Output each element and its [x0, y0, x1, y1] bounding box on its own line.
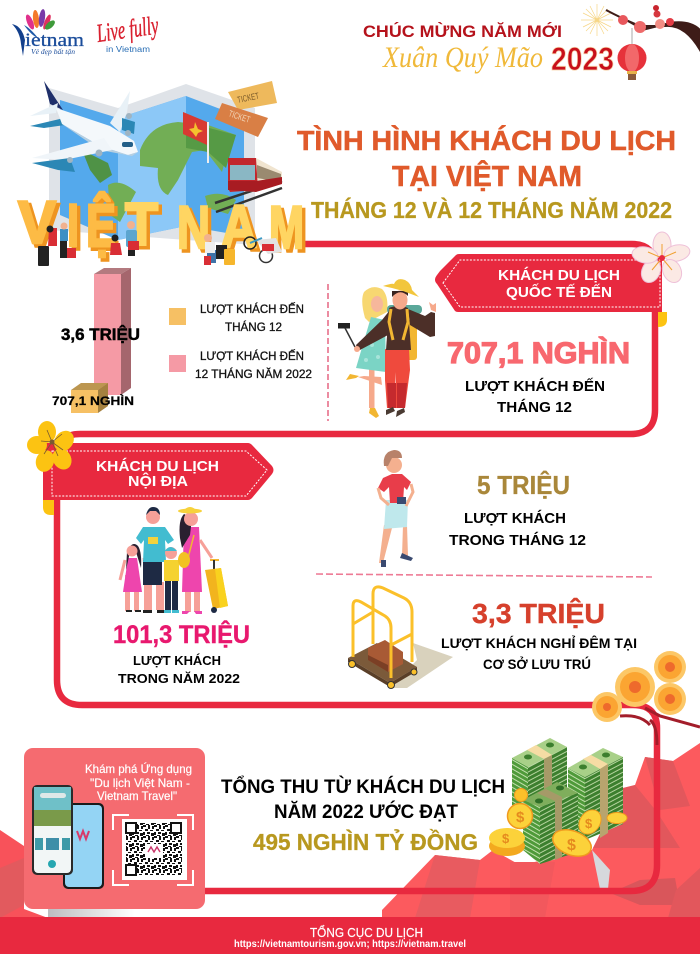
girl: [120, 544, 146, 612]
illustration: money stacks and coins: [489, 738, 627, 864]
total revenue text: NĂM 2022 ƯỚC ĐẠT: [274, 801, 458, 823]
3D letters VIET NAM: Ệ: [86, 192, 116, 259]
banner: domestic visitors: NỘI ĐỊA: [128, 472, 188, 490]
panel: app promotion: [24, 748, 205, 909]
stat: 101.3 million: LƯỢT KHÁCH: [133, 653, 221, 668]
3D letters VIET NAM: I: [67, 192, 79, 259]
stat: 3.3 million: [441, 598, 637, 672]
icon: yellow flower: [27, 421, 78, 474]
boy: [164, 547, 179, 613]
3D letters VIET NAM: I: [70, 195, 82, 262]
3D letters VIET NAM: M: [272, 197, 307, 264]
illustration: tourist boy: [378, 450, 413, 567]
panel: app promotion: "Du lịch Việt Nam -: [90, 776, 190, 790]
stat: 707.1 thousand: LƯỢT KHÁCH ĐẾN: [465, 378, 605, 395]
stat: 101.3 million: TRONG NĂM 2022: [118, 671, 240, 686]
small travellers: [38, 221, 282, 266]
banner: domestic visitors: [43, 443, 274, 515]
suitcase: [205, 559, 228, 613]
logo: Vietnam: [12, 9, 84, 56]
bar chart: [52, 268, 140, 413]
main title: TÌNH HÌNH KHÁCH DU LỊCH: [297, 125, 676, 156]
footer: TỔNG CỤC DU LỊCH: [310, 925, 423, 940]
3D letters VIET NAM: V: [21, 192, 59, 259]
stat: 3.3 million: LƯỢT KHÁCH NGHỈ ĐÊM TẠI: [441, 634, 637, 651]
tickets: [215, 81, 277, 137]
3D letters VIET NAM: [18, 189, 307, 264]
coins: $: [585, 816, 593, 831]
logo: Live fully in Vietnam: Live fully: [94, 11, 161, 48]
father: [136, 507, 174, 613]
banner: international visitors: QUỐC TẾ ĐẾN: [506, 283, 612, 301]
stat: 707.1 thousand: [447, 336, 630, 416]
illustration: travel map hero: [18, 81, 307, 266]
total revenue text: 495 NGHÌN TỶ ĐỒNG: [253, 827, 478, 855]
stat: 5 million: TRONG THÁNG 12: [449, 532, 586, 549]
stat: 5 million: [449, 470, 586, 549]
illustration: couple taking selfie: [338, 279, 436, 418]
3D letters VIET NAM: Ệ: [89, 195, 119, 262]
back left stack: [512, 738, 567, 815]
airplane: [30, 81, 138, 172]
stat: 707.1 thousand: THÁNG 12: [497, 399, 572, 416]
legend: LƯỢT KHÁCH ĐẾN: [200, 348, 304, 363]
main title: THÁNG 12 VÀ 12 THÁNG NĂM 2022: [311, 196, 672, 223]
legend: THÁNG 12: [225, 319, 282, 334]
banner: domestic visitors: KHÁCH DU LỊCH: [96, 458, 219, 475]
stat: 707.1 thousand: 707,1 NGHÌN: [447, 336, 630, 370]
banner: international visitors: [435, 254, 667, 327]
coins: $: [502, 831, 510, 846]
main title: TẠI VIỆT NAM: [392, 159, 582, 193]
3D letters VIET NAM: V: [18, 189, 56, 256]
logo: Live fully in Vietnam: [94, 11, 161, 54]
illustration: family with suitcase: [120, 507, 228, 614]
mother: [178, 507, 212, 614]
panel: app promotion: Vietnam Travel": [97, 789, 177, 803]
logo: Vietnam: ietnam: [25, 30, 84, 51]
bar: 12 months: [94, 268, 131, 395]
logo: Live fully in Vietnam: in Vietnam: [106, 45, 150, 54]
phone back: [63, 803, 104, 889]
front stack: [523, 782, 578, 864]
legend: [169, 301, 312, 381]
footer: [0, 917, 700, 954]
new year greeting: Xuân Quý Mão: [382, 41, 543, 74]
icon: apricot blossoms: [592, 651, 700, 745]
bar chart: 707,1 NGHÌN: [52, 393, 134, 408]
tickets: TICKET: [236, 91, 260, 105]
legend: LƯỢT KHÁCH ĐẾN: [200, 301, 304, 316]
bar chart: 3,6 TRIỆU: [61, 325, 140, 344]
new year greeting: CHÚC MỪNG NĂM MỚI: [363, 22, 562, 41]
woman: [358, 376, 382, 385]
3D letters VIET NAM: T: [128, 194, 161, 261]
3D letters VIET NAM: N: [180, 197, 213, 264]
main title: [297, 125, 676, 223]
tickets: TICKET: [227, 108, 252, 125]
icon: blossom branch: [606, 5, 700, 50]
3D letters VIET NAM: A: [221, 193, 257, 260]
stat: 101.3 million: 101,3 TRIỆU: [113, 619, 250, 649]
3D letters VIET NAM: N: [177, 194, 210, 261]
coins: $: [567, 837, 576, 854]
red connecting frame line: [57, 244, 657, 891]
coins: [489, 788, 627, 861]
world map: [49, 84, 255, 245]
stat: 3.3 million: CƠ SỞ LƯU TRÚ: [483, 655, 591, 672]
3D letters VIET NAM: T: [125, 191, 158, 258]
coins: $: [516, 809, 525, 826]
new year greeting: [363, 22, 614, 77]
man: [406, 320, 417, 360]
logo: Vietnam: Vẻ đẹp bất tận: [31, 48, 76, 56]
icon: lantern: [618, 28, 646, 80]
icon: fireworks: [581, 4, 613, 36]
3D letters VIET NAM: M: [269, 194, 304, 261]
red paper fan background: [0, 743, 700, 918]
new year greeting: 2023: [551, 41, 614, 77]
illustration: luggage trolley: [348, 587, 453, 688]
total revenue text: [221, 776, 505, 855]
total revenue text: TỔNG THU TỪ KHÁCH DU LỊCH: [221, 776, 505, 798]
footer: https://vietnamtourism.gov.vn; https://vietnam.travel: [234, 939, 466, 950]
banner: international visitors: KHÁCH DU LỊCH: [498, 267, 620, 284]
stat: 5 million: LƯỢT KHÁCH: [464, 510, 566, 527]
legend: 12 THÁNG NĂM 2022: [195, 366, 312, 381]
back right stack: [568, 748, 623, 840]
panel: app promotion: Khám phá Ứng dụng: [85, 761, 192, 776]
QR code: [113, 815, 193, 885]
3D letters VIET NAM: A: [224, 196, 260, 263]
train: [215, 158, 282, 212]
bar: december: [71, 383, 108, 413]
flag: [183, 112, 208, 163]
icon: plum flower: [631, 232, 691, 286]
stat: 5 million: 5 TRIỆU: [477, 470, 570, 500]
stat: 3.3 million: 3,3 TRIỆU: [472, 598, 605, 629]
phone front: [32, 785, 73, 875]
stat: 101.3 million: [113, 619, 250, 686]
